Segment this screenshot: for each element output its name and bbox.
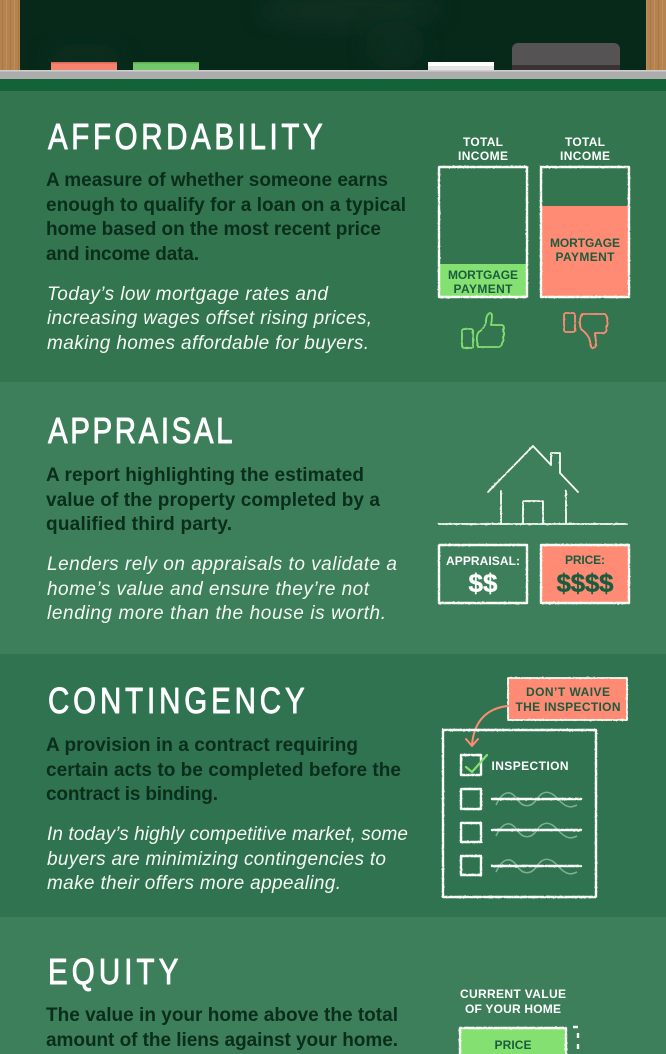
definition text: value of the property completed by a	[46, 490, 380, 511]
chart: unaffordable income bar: PAYMENT	[556, 250, 615, 264]
definition text: enough to qualify for a loan on a typical	[46, 195, 406, 216]
definition text: certain acts to be completed before the	[46, 760, 401, 781]
price box: $$$$	[556, 568, 614, 598]
italic commentary: increasing wages offset rising prices,	[47, 308, 372, 329]
definition text: contract is binding.	[46, 784, 218, 805]
unchecked item	[461, 823, 581, 842]
italic commentary: Lenders rely on appraisals to validate a	[47, 554, 397, 575]
heading: affordability: AFFORDABILITY	[48, 116, 323, 157]
appraisal value box: $$	[468, 568, 498, 598]
green chalk	[133, 62, 199, 70]
italic commentary: making homes affordable for buyers.	[47, 333, 369, 354]
icon: thumbs down	[564, 313, 608, 348]
panel: affordability	[0, 91, 666, 382]
definition text: The value in your home above the total	[46, 1005, 398, 1026]
checked item: inspection: INSPECTION	[492, 759, 568, 773]
chart: current value of home: OF YOUR HOME	[465, 1002, 561, 1016]
definition text	[46, 465, 380, 535]
italic commentary: In today’s highly competitive market, some	[47, 824, 408, 845]
italic commentary	[47, 554, 397, 624]
arrow: callout to checkbox	[466, 706, 508, 746]
heading: equity: EQUITY	[48, 951, 178, 992]
salmon chalk	[51, 62, 117, 70]
icon: house	[439, 446, 627, 524]
panel: appraisal	[0, 382, 666, 654]
chart: current value of home	[460, 987, 578, 1054]
italic commentary: home’s value and ensure they’re not	[47, 579, 370, 600]
chart: affordable income bar: PAYMENT	[454, 282, 513, 296]
callout: don't waive the inspection: THE INSPECTION	[516, 700, 620, 714]
chart: unaffordable income bar	[541, 135, 629, 297]
chart: current value of home: PRICE	[494, 1038, 532, 1052]
icon: thumbs up	[462, 313, 504, 348]
definition text: home based on the most recent price	[46, 219, 381, 240]
italic commentary: buyers are minimizing contingencies to	[47, 849, 386, 870]
chart: affordable income bar	[439, 135, 527, 297]
italic commentary: Today’s low mortgage rates and	[47, 284, 329, 305]
definition text: A report highlighting the estimated	[46, 465, 364, 486]
callout: don't waive the inspection	[508, 678, 627, 720]
definition text: amount of the liens against your home.	[46, 1030, 398, 1051]
unchecked item	[461, 789, 581, 809]
eraser	[512, 43, 620, 70]
definition text: and income data.	[46, 244, 199, 265]
chart: affordable income bar: MORTGAGE	[448, 268, 518, 282]
italic commentary	[47, 284, 372, 354]
chart: affordable income bar: INCOME	[458, 149, 508, 163]
chalk ledge	[0, 70, 666, 79]
definition text	[46, 170, 406, 265]
appraisal value box	[439, 545, 527, 603]
italic commentary: make their offers more appealing.	[47, 873, 341, 894]
chart: unaffordable income bar: MORTGAGE	[550, 236, 620, 250]
price box: PRICE:	[565, 553, 605, 567]
price box	[541, 545, 629, 603]
definition text: A provision in a contract requiring	[46, 735, 358, 756]
heading: appraisal: APPRAISAL	[48, 410, 233, 451]
chart: affordable income bar: TOTAL	[463, 135, 503, 149]
heading: contingency: CONTINGENCY	[48, 680, 305, 721]
definition text: A measure of whether someone earns	[46, 170, 388, 191]
italic commentary: lending more than the house is worth.	[47, 603, 386, 624]
unchecked item	[461, 856, 581, 875]
definition text	[46, 735, 401, 805]
callout: don't waive the inspection: DON’T WAIVE	[526, 685, 610, 699]
panel: equity	[0, 917, 666, 1054]
chalkboard with tray	[0, 0, 666, 91]
chart: unaffordable income bar: TOTAL	[565, 135, 605, 149]
white chalk	[428, 62, 494, 71]
appraisal value box: APPRAISAL:	[446, 554, 520, 568]
checklist	[443, 730, 596, 897]
panel: contingency	[0, 654, 666, 917]
chart: unaffordable income bar: INCOME	[560, 149, 610, 163]
definition text: qualified third party.	[46, 514, 232, 535]
chart: current value of home: CURRENT VALUE	[460, 987, 566, 1001]
checked item: inspection	[461, 755, 568, 775]
definition text	[46, 1005, 398, 1051]
italic commentary	[47, 824, 408, 894]
